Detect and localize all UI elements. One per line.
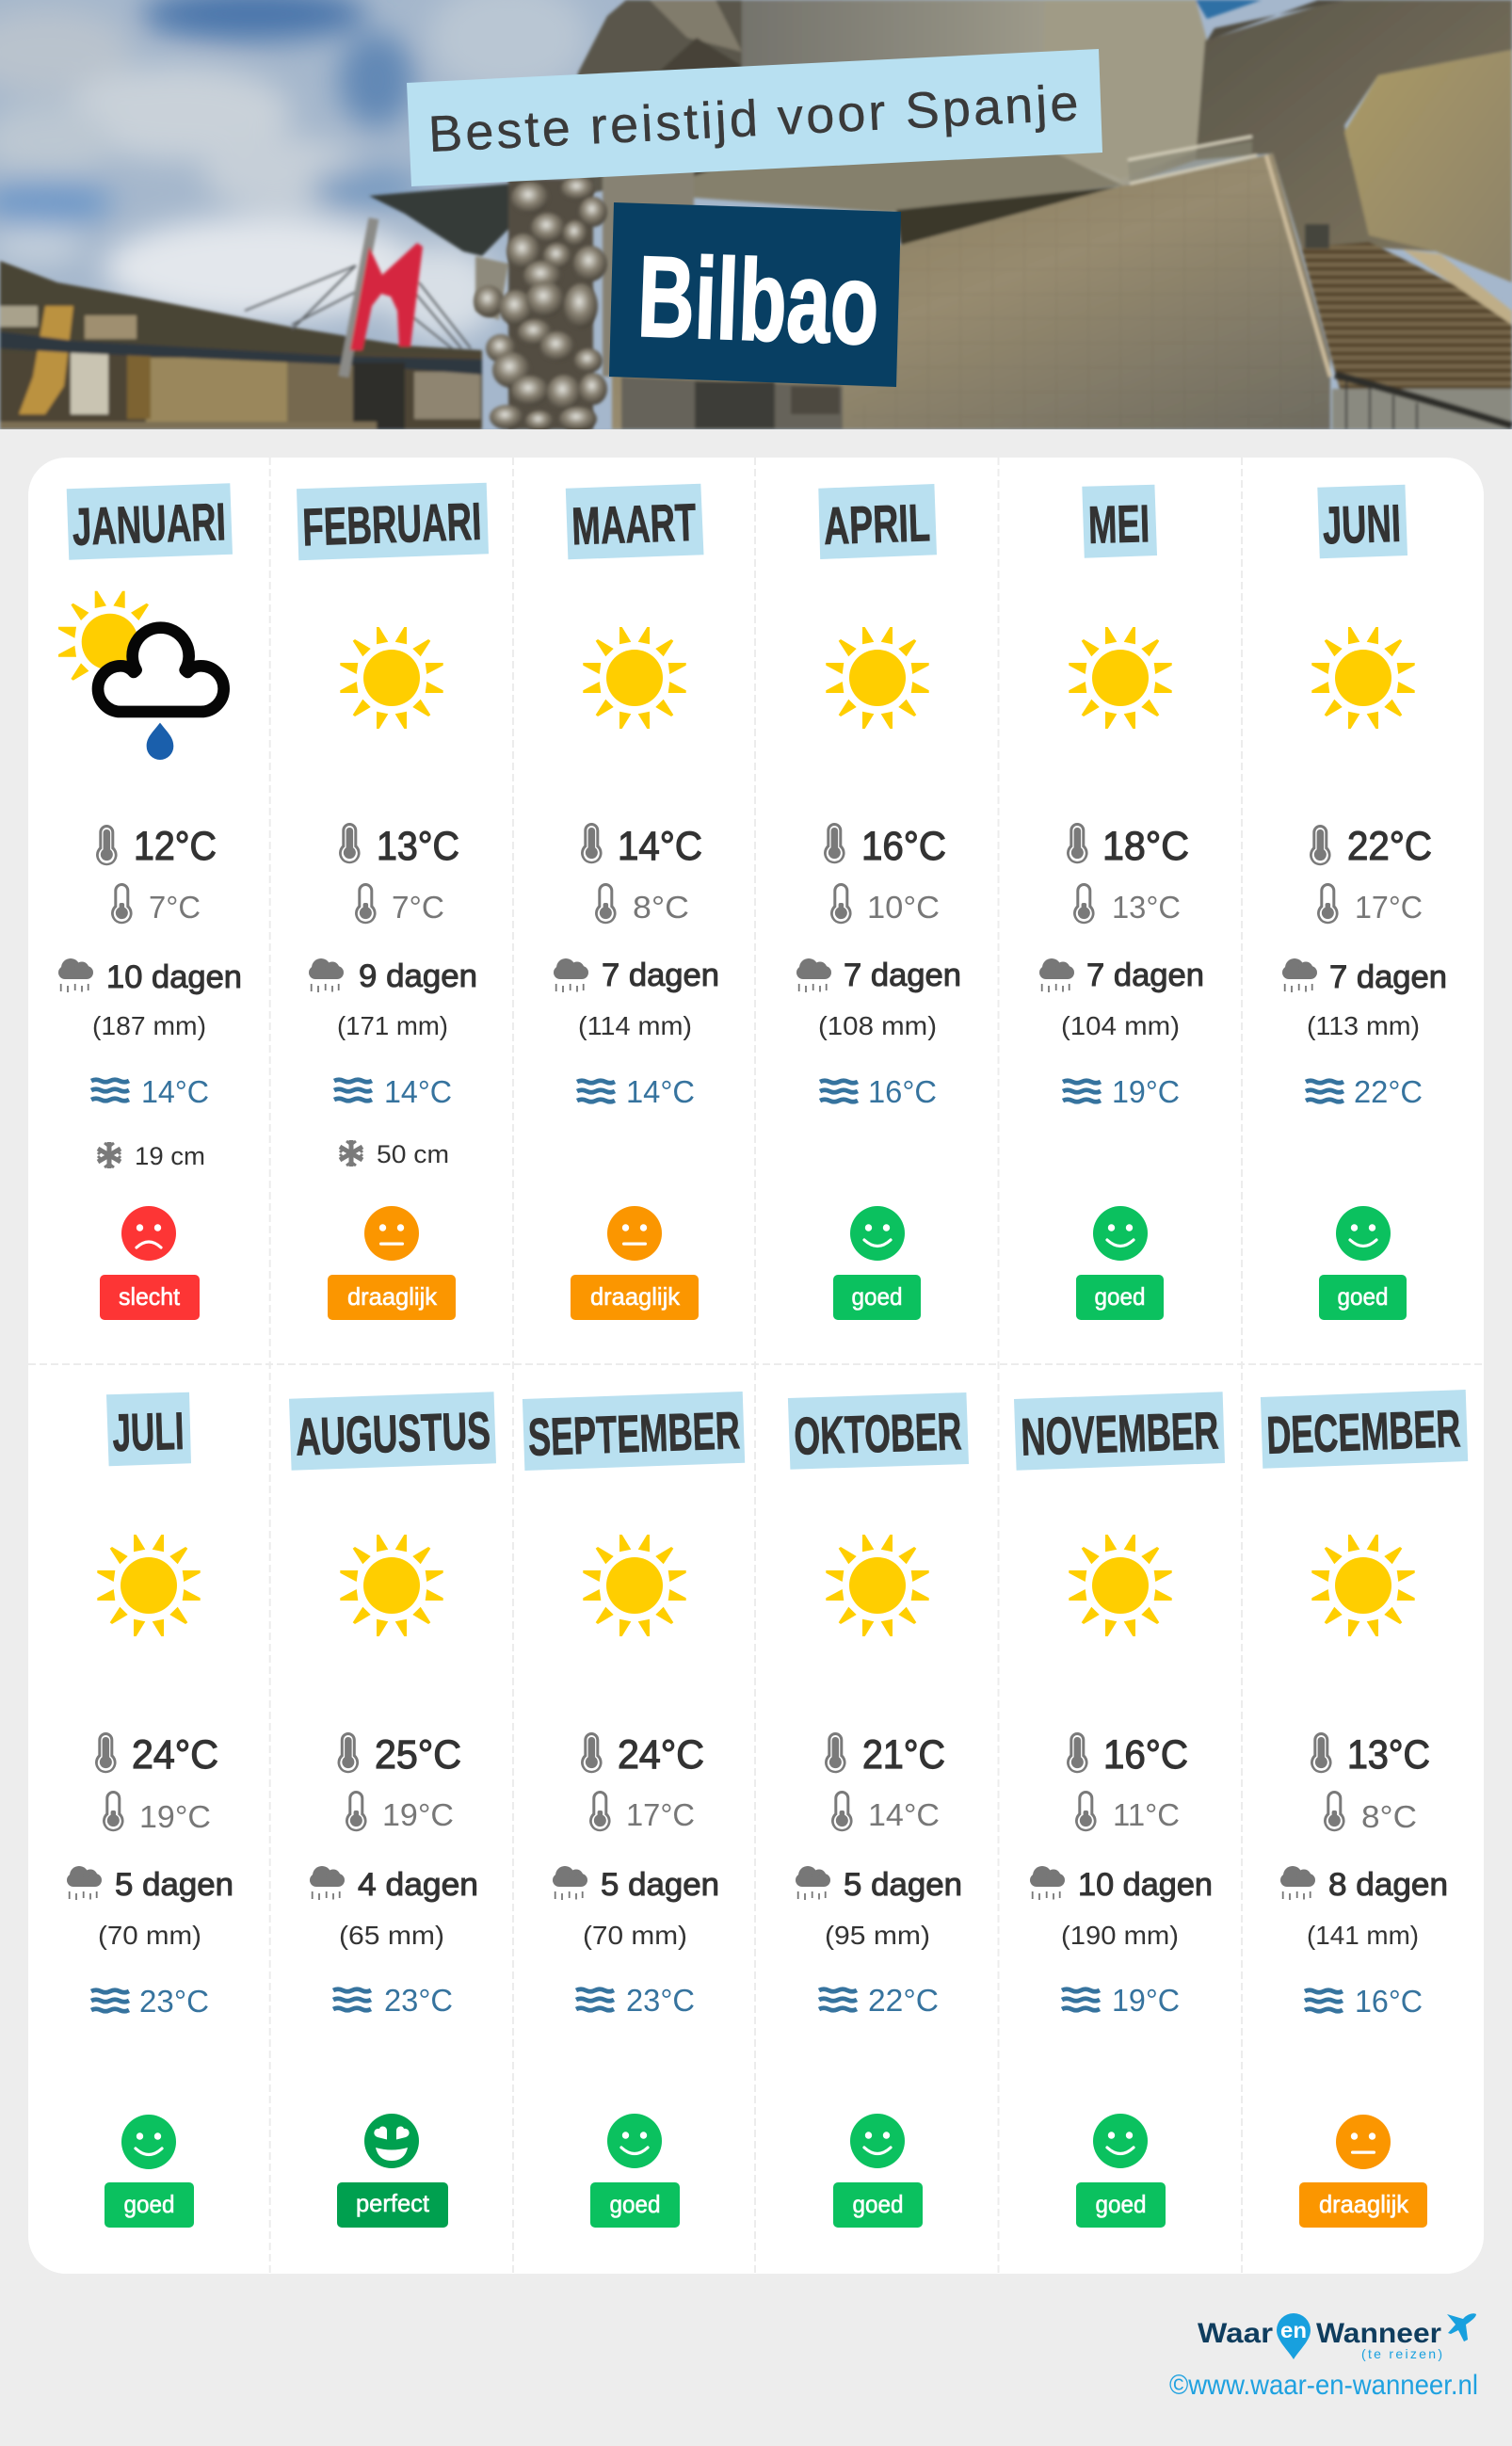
panel: januari <box>58 483 242 1320</box>
maximum temperature <box>1310 824 1432 869</box>
panel: juni <box>1282 485 1447 1320</box>
rain days: 9 dagen <box>359 958 477 994</box>
rainfall: (95 mm) <box>825 1921 930 1950</box>
rain days: 7 dagen <box>1329 959 1447 995</box>
logo: Waar en Wanneer: Waar <box>1198 2318 1273 2349</box>
rating <box>1299 2115 1427 2228</box>
rating: goed <box>610 2190 661 2218</box>
sea temperature: 23°C <box>139 1984 209 2019</box>
title banner <box>407 49 1102 186</box>
rating: goed <box>853 2190 904 2218</box>
snow: 50 cm <box>377 1140 449 1168</box>
maximum temperature <box>581 823 702 869</box>
month label <box>67 483 233 560</box>
maximum temperature <box>1311 1732 1430 1778</box>
rain days: 7 dagen <box>844 957 961 993</box>
month label <box>297 483 489 560</box>
icon: sun <box>1311 1535 1415 1636</box>
minimum temperature: 7°C <box>392 890 444 925</box>
sea temperature <box>1062 1983 1180 2018</box>
month label <box>566 484 704 559</box>
maximum temperature: 18°C <box>1102 824 1189 869</box>
panel: mei <box>1039 485 1204 1320</box>
sculpture <box>474 176 607 431</box>
rating: goed <box>851 1282 902 1311</box>
minimum temperature: 17°C <box>1355 890 1423 925</box>
minimum temperature: 8°C <box>633 890 689 925</box>
website link: ©www.waar-en-wanneer.nl <box>1169 2370 1478 2401</box>
sea temperature <box>333 1983 453 2018</box>
sea temperature: 23°C <box>384 1983 453 2018</box>
sea temperature <box>91 1074 209 1109</box>
minimum temperature <box>111 883 201 925</box>
icon: plane <box>1447 2313 1476 2341</box>
month label: JULI <box>112 1401 185 1462</box>
logo: Waar en Wanneer: Wanneer <box>1316 2318 1441 2349</box>
sea temperature <box>576 1983 695 2018</box>
month label: MEI <box>1087 493 1150 555</box>
rainfall: (104 mm) <box>1061 1011 1180 1040</box>
rating: slecht <box>119 1282 181 1311</box>
rain days: 5 dagen <box>115 1867 233 1903</box>
icon: sun <box>340 627 443 729</box>
month label: JUNI <box>1322 493 1402 555</box>
rating: goed <box>1096 2190 1147 2218</box>
rain days: 7 dagen <box>1086 957 1204 993</box>
sea temperature: 14°C <box>141 1074 209 1109</box>
rain days <box>309 958 477 994</box>
month label <box>106 1392 191 1466</box>
rain days <box>796 1866 962 1903</box>
sea temperature <box>1306 1074 1423 1109</box>
maximum temperature <box>1067 823 1189 869</box>
month label <box>1317 485 1407 558</box>
maximum temperature: 12°C <box>134 824 217 869</box>
month label <box>289 1392 496 1471</box>
rain days <box>1282 958 1447 995</box>
maximum temperature <box>339 823 459 869</box>
sea temperature: 23°C <box>626 1983 695 2018</box>
icon: sun <box>1069 627 1172 729</box>
maximum temperature: 22°C <box>1347 824 1432 869</box>
maximum temperature <box>825 1732 945 1778</box>
sea temperature <box>1305 1984 1423 2019</box>
maximum temperature: 25°C <box>375 1732 461 1778</box>
month label: OKTOBER <box>793 1401 962 1466</box>
minimum temperature: 8°C <box>1361 1799 1417 1834</box>
rating <box>1319 1206 1407 1320</box>
minimum temperature: 19°C <box>139 1799 211 1834</box>
city title: Bilbao <box>635 233 881 368</box>
title banner: Beste reistijd voor Spanje <box>427 74 1080 163</box>
rating <box>337 2114 448 2228</box>
maximum temperature: 16°C <box>861 824 946 869</box>
maximum temperature <box>95 1732 218 1778</box>
minimum temperature <box>1324 1791 1417 1834</box>
panel: april <box>796 484 961 1320</box>
rating <box>328 1206 456 1320</box>
minimum temperature: 14°C <box>868 1797 940 1832</box>
sea temperature <box>820 1074 937 1109</box>
month label <box>788 1392 969 1470</box>
panel: november <box>1014 1392 1225 2228</box>
maximum temperature: 24°C <box>132 1732 218 1778</box>
maximum temperature: 24°C <box>618 1732 704 1778</box>
rating <box>833 2114 923 2228</box>
minimum temperature <box>589 1791 695 1832</box>
panel: september <box>523 1392 745 2228</box>
rain days: 7 dagen <box>602 957 719 993</box>
sea temperature: 22°C <box>868 1983 939 2018</box>
panel: juli <box>67 1392 233 2228</box>
sea temperature: 19°C <box>1112 1983 1180 2018</box>
header photo <box>0 0 1512 431</box>
rainfall: (141 mm) <box>1307 1921 1419 1950</box>
rainfall: (187 mm) <box>92 1011 206 1040</box>
sea temperature <box>819 1983 939 2018</box>
snow: 19 cm <box>135 1142 205 1170</box>
panel: augustus <box>289 1392 496 2228</box>
rating <box>1076 1206 1164 1320</box>
rating: goed <box>1094 1282 1145 1311</box>
icon: map pin <box>1277 2313 1311 2359</box>
rain days <box>310 1866 478 1903</box>
rating <box>105 2115 194 2228</box>
month label: MAART <box>571 492 697 555</box>
maximum temperature: 16°C <box>1103 1732 1188 1778</box>
city and bridge <box>0 218 482 429</box>
icon: map pin: en <box>1280 2318 1307 2342</box>
rating: draaglijk <box>347 1282 438 1311</box>
rainfall: (70 mm) <box>583 1921 687 1950</box>
icon: sun <box>1311 627 1415 729</box>
minimum temperature: 17°C <box>626 1797 695 1832</box>
month label: AUGUSTUS <box>295 1400 491 1467</box>
rainfall: (114 mm) <box>578 1011 692 1040</box>
month label: APRIL <box>823 492 931 555</box>
rainfall: (108 mm) <box>818 1011 937 1040</box>
rating: goed <box>124 2190 175 2218</box>
icon: sun <box>340 1535 443 1636</box>
month label <box>818 484 937 559</box>
minimum temperature: 13°C <box>1112 890 1181 925</box>
month label <box>1014 1392 1225 1471</box>
rainfall: (113 mm) <box>1307 1011 1420 1040</box>
minimum temperature <box>595 883 689 925</box>
month label: JANUARI <box>72 491 227 556</box>
rainfall: (70 mm) <box>98 1921 201 1950</box>
month label <box>1082 485 1157 558</box>
minimum temperature <box>1073 883 1181 925</box>
maximum temperature <box>824 823 946 869</box>
minimum temperature: 11°C <box>1113 1797 1180 1832</box>
minimum temperature: 19°C <box>382 1797 454 1832</box>
month label: FEBRUARI <box>301 491 482 556</box>
museum <box>369 0 1512 429</box>
city title <box>609 202 901 387</box>
rain days: 5 dagen <box>844 1867 962 1903</box>
minimum temperature <box>103 1791 211 1834</box>
rating <box>1076 2114 1166 2228</box>
maximum temperature: 14°C <box>618 824 702 869</box>
minimum temperature <box>1317 883 1423 925</box>
panel: februari <box>297 483 489 1320</box>
sea temperature: 14°C <box>626 1074 695 1109</box>
month label <box>523 1392 745 1471</box>
rain days: 10 dagen <box>106 959 242 995</box>
rating <box>590 2114 680 2228</box>
icon: sun <box>583 1535 686 1636</box>
rating: goed <box>1337 1282 1388 1311</box>
minimum temperature <box>831 1791 940 1832</box>
maximum temperature <box>96 824 217 869</box>
rain days <box>553 1866 719 1903</box>
rain days: 5 dagen <box>601 1867 719 1903</box>
icon: sun <box>1069 1535 1172 1636</box>
icon: sun <box>97 1535 201 1636</box>
panel: maart <box>554 484 719 1320</box>
sea temperature: 22°C <box>1354 1074 1423 1109</box>
snow <box>340 1140 449 1168</box>
rating: perfect <box>356 2189 430 2217</box>
month label: SEPTEMBER <box>527 1400 741 1467</box>
minimum temperature <box>830 883 940 925</box>
rain days: 4 dagen <box>358 1867 478 1903</box>
sea temperature <box>577 1074 695 1109</box>
panel: climate table <box>28 458 1484 2274</box>
rating: draaglijk <box>1319 2190 1409 2218</box>
icon: sun <box>583 627 686 729</box>
rain days <box>1280 1866 1448 1903</box>
minimum temperature: 10°C <box>867 890 940 925</box>
icon: sun <box>826 1535 929 1636</box>
sea temperature: 16°C <box>1355 1984 1423 2019</box>
maximum temperature: 13°C <box>377 824 459 869</box>
sea temperature: 19°C <box>1112 1074 1180 1109</box>
sea temperature: 14°C <box>384 1074 452 1109</box>
rating <box>833 1206 921 1320</box>
minimum temperature <box>355 883 444 925</box>
month label: NOVEMBER <box>1020 1400 1219 1467</box>
icon: sun with rain cloud <box>58 591 224 760</box>
maximum temperature: 13°C <box>1347 1732 1430 1778</box>
snow <box>98 1142 205 1170</box>
minimum temperature: 7°C <box>149 890 201 925</box>
rainfall: (65 mm) <box>339 1921 444 1950</box>
sea temperature <box>1063 1074 1180 1109</box>
rain days <box>67 1866 233 1903</box>
minimum temperature <box>1075 1791 1180 1832</box>
rainfall: (171 mm) <box>337 1011 448 1040</box>
logo: Waar en Wanneer: (te reizen) <box>1361 2346 1442 2361</box>
rain days: 8 dagen <box>1328 1867 1448 1903</box>
sea temperature: 16°C <box>868 1074 937 1109</box>
maximum temperature <box>581 1732 704 1778</box>
panel: december <box>1261 1390 1468 2228</box>
rating <box>100 1206 200 1320</box>
rainfall: (190 mm) <box>1061 1921 1179 1950</box>
icon: sun <box>826 627 929 729</box>
minimum temperature <box>346 1791 454 1832</box>
maximum temperature: 21°C <box>862 1732 945 1778</box>
panel: oktober <box>788 1392 969 2228</box>
rating <box>571 1206 699 1320</box>
maximum temperature <box>1067 1732 1188 1778</box>
rating: draaglijk <box>590 1282 681 1311</box>
logo: Waar en Wanneer <box>1198 2313 1476 2361</box>
maximum temperature <box>337 1732 461 1778</box>
sea temperature <box>334 1074 452 1109</box>
sea temperature <box>91 1984 209 2019</box>
rain days: 10 dagen <box>1078 1867 1213 1903</box>
